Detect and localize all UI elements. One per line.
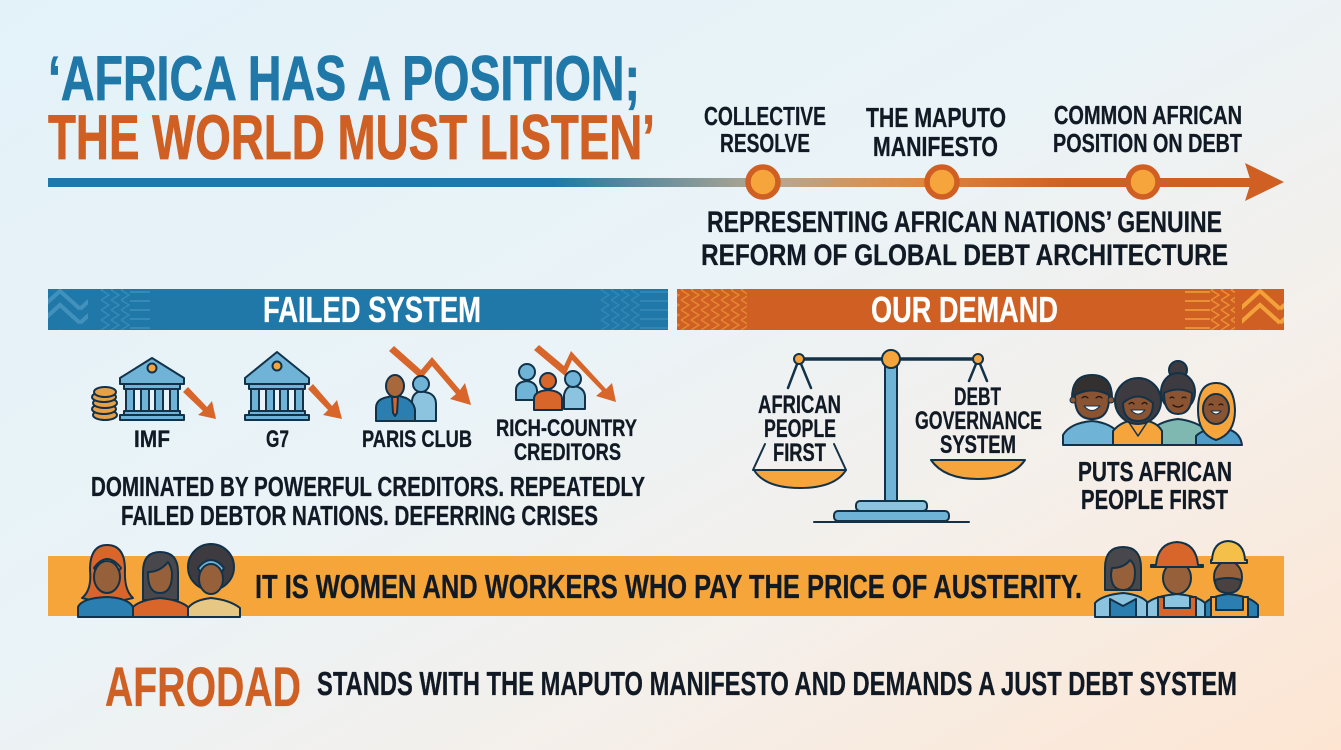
- arrow: G7 decline: [308, 384, 342, 419]
- left pan: [753, 444, 846, 488]
- milestone label: the maputo manifesto: MANIFESTO: [873, 131, 998, 162]
- failed system description: [91, 471, 645, 531]
- right pan label: GOVERNANCE: [915, 407, 1042, 435]
- coins: [92, 387, 117, 420]
- right pan: [931, 460, 1025, 479]
- label: puts African people first: PUTS AFRICAN: [1078, 456, 1232, 487]
- icon: Paris Club people with falling arrow: [376, 346, 471, 421]
- right pan label: DEBT: [954, 383, 1001, 411]
- left pan label: AFRICAN: [758, 391, 841, 419]
- title: THE WORLD MUST LISTEN’: [48, 103, 655, 173]
- person: woman with bun: [1150, 361, 1208, 445]
- panel header: failed system: FAILED SYSTEM: [263, 289, 481, 330]
- person: woman with afro: [1113, 378, 1162, 445]
- milestone label: the maputo manifesto: THE MAPUTO: [866, 102, 1006, 133]
- title: ‘AFRICA HAS A POSITION;: [48, 44, 640, 114]
- label: Paris Club: PARIS CLUB: [362, 426, 472, 453]
- worker in orange hard hat: [1147, 542, 1205, 617]
- scale post and base: [814, 366, 969, 522]
- milestone label: common african position: COMMON AFRICAN: [1054, 100, 1242, 130]
- failed system description: DOMINATED BY POWERFUL CREDITORS. REPEATEDLY: [91, 471, 645, 502]
- person: woman with hijab: [1196, 383, 1242, 445]
- panel header: failed system: [48, 289, 668, 330]
- milestone nodes: [748, 167, 1158, 197]
- label: puts African people first: PEOPLE FIRST: [1081, 484, 1228, 515]
- label: IMF: IMF: [134, 426, 170, 453]
- label: rich-country creditors: [496, 415, 637, 466]
- timeline arrow with milestones: [48, 163, 1284, 201]
- label: G7: G7: [266, 426, 289, 453]
- icon: G7 bank: [245, 352, 309, 420]
- person: man: [1063, 375, 1120, 445]
- woman with long hair: [133, 552, 188, 617]
- panel header: our demand: [677, 289, 1284, 330]
- icon: balance scale: [753, 350, 1042, 522]
- icon: three women: [78, 544, 240, 617]
- left pan label: PEOPLE: [764, 415, 836, 443]
- left pan label: [758, 391, 841, 467]
- footer organisation name: AFRODAD: [105, 655, 301, 718]
- icon: three workers: [1095, 541, 1258, 617]
- icon: IMF bank with coins: [92, 358, 184, 420]
- label: rich-country creditors: CREDITORS: [514, 439, 621, 466]
- icon: smiling African people: [1063, 361, 1242, 445]
- office worker: [1095, 547, 1148, 617]
- subtitle text: [701, 206, 1228, 272]
- panel header: our demand: OUR DEMAND: [871, 289, 1058, 330]
- label: rich-country creditors: RICH-COUNTRY: [496, 415, 637, 442]
- woman with afro: [188, 544, 240, 617]
- label: puts African people first: [1078, 456, 1232, 515]
- icon: creditors group with falling arrow: [516, 345, 616, 410]
- left pan label: FIRST: [773, 439, 826, 467]
- subtitle text: REFORM OF GLOBAL DEBT ARCHITECTURE: [701, 239, 1228, 272]
- milestone label: collective resolve: RESOLVE: [720, 128, 810, 158]
- right pan label: SYSTEM: [940, 431, 1016, 459]
- orange callout band: IT IS WOMEN AND WORKERS WHO PAY THE PRICE OF AUSTERITY.: [255, 568, 1082, 605]
- failed system description: FAILED DEBTOR NATIONS. DEFERRING CRISES: [121, 500, 598, 531]
- woman in headscarf: [78, 545, 133, 617]
- milestone label: collective resolve: [704, 101, 826, 158]
- milestone label: collective resolve: COLLECTIVE: [704, 101, 826, 131]
- milestone label: the maputo manifesto: [866, 102, 1006, 162]
- worker in yellow hard hat with beard: [1205, 541, 1258, 617]
- orange callout band: [48, 556, 1284, 616]
- scale beam: [788, 350, 987, 388]
- right pan label: [915, 383, 1042, 459]
- milestone label: common african position: POSITION ON DEBT: [1053, 128, 1242, 158]
- arrow: IMF decline: [183, 387, 216, 419]
- title: [48, 44, 655, 173]
- milestone label: common african position: [1053, 100, 1242, 158]
